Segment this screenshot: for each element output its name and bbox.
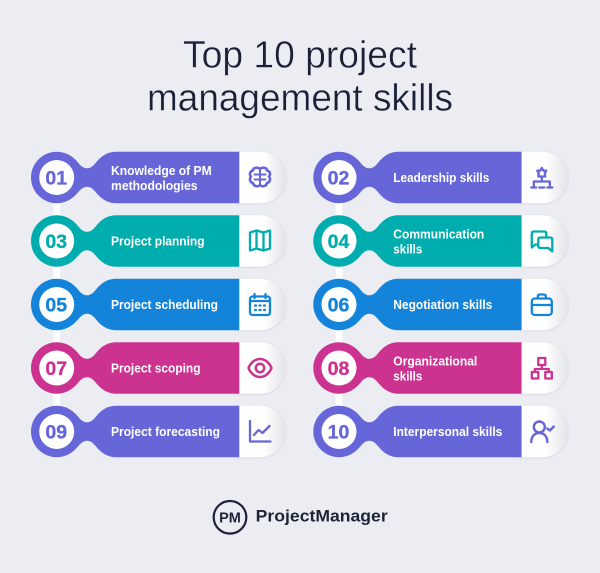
pill <box>31 279 239 330</box>
icon: calendar <box>250 294 270 315</box>
pill <box>313 406 522 457</box>
label: Project planning <box>111 234 205 248</box>
label: Organizational <box>393 354 477 368</box>
logo: ProjectManager <box>214 501 388 534</box>
wordmark: ProjectManager <box>256 507 388 526</box>
number badge <box>322 224 356 258</box>
logo mark <box>214 501 246 534</box>
title: management skills <box>147 78 453 120</box>
connector: right column <box>336 175 342 430</box>
number badge <box>322 287 356 322</box>
number badge <box>39 160 74 195</box>
icon tab <box>518 152 568 203</box>
pill <box>313 152 522 203</box>
number: 07 <box>45 358 67 380</box>
icon: eye <box>248 359 272 377</box>
title <box>147 34 453 120</box>
icon tab <box>518 215 568 267</box>
icon tab <box>518 342 568 394</box>
number badge <box>322 160 356 195</box>
icon tab <box>236 215 286 267</box>
title: Top 10 project <box>183 34 417 76</box>
skill 04 <box>313 215 568 267</box>
number: 03 <box>45 231 67 253</box>
pill <box>313 215 522 267</box>
skill 05 <box>31 279 286 330</box>
label: Knowledge of PM <box>111 163 212 178</box>
number badge <box>39 414 74 449</box>
label line 2: methodologies <box>111 178 198 193</box>
label line 2: skills <box>393 368 422 384</box>
skill 02 <box>313 152 568 203</box>
icon tab <box>236 342 286 394</box>
connector: left column <box>54 175 60 430</box>
number: 04 <box>328 231 349 253</box>
label: Interpersonal skills <box>393 424 502 439</box>
number: 01 <box>45 168 67 190</box>
number: 10 <box>328 422 349 444</box>
skill 07 <box>31 342 286 394</box>
number badge <box>39 350 74 386</box>
icon: chat bubbles <box>532 232 552 252</box>
icon: person with check <box>531 422 554 442</box>
number badge <box>322 414 356 449</box>
icon: brain <box>250 168 270 186</box>
pill <box>31 406 239 457</box>
number: 06 <box>328 294 349 316</box>
skill 03 <box>31 215 286 267</box>
pill <box>31 152 239 203</box>
icon: hierarchy with star <box>531 168 552 188</box>
icon: map <box>250 230 270 250</box>
label: Communication <box>393 226 484 242</box>
number badge <box>39 287 74 322</box>
icon tab <box>236 152 286 203</box>
label: Leadership skills <box>393 170 489 185</box>
label line 2: skills <box>393 242 422 256</box>
number: 09 <box>45 422 67 444</box>
icon: org chart <box>532 358 552 378</box>
logo mark letters: PM <box>219 510 241 526</box>
number: 08 <box>328 358 349 380</box>
icon: line chart <box>250 421 270 442</box>
skill 09 <box>31 406 286 457</box>
icon tab <box>236 406 286 457</box>
number badge <box>322 350 356 386</box>
icon tab <box>518 406 568 457</box>
icon tab <box>518 279 568 330</box>
pill <box>31 215 239 267</box>
icon tab <box>236 279 286 330</box>
label: Project scheduling <box>111 297 218 312</box>
number: 02 <box>328 168 349 190</box>
number: 05 <box>45 294 67 316</box>
pill <box>313 279 522 330</box>
number badge <box>39 224 74 258</box>
skill 08 <box>313 342 568 394</box>
label: Project forecasting <box>111 424 220 439</box>
pill <box>31 342 239 394</box>
label: Negotiation skills <box>393 297 492 312</box>
skill 01 <box>31 152 286 203</box>
skill 10 <box>313 406 568 457</box>
icon: briefcase <box>532 294 552 315</box>
skill 06 <box>313 279 568 330</box>
label: Project scoping <box>111 360 201 376</box>
pill <box>313 342 522 394</box>
